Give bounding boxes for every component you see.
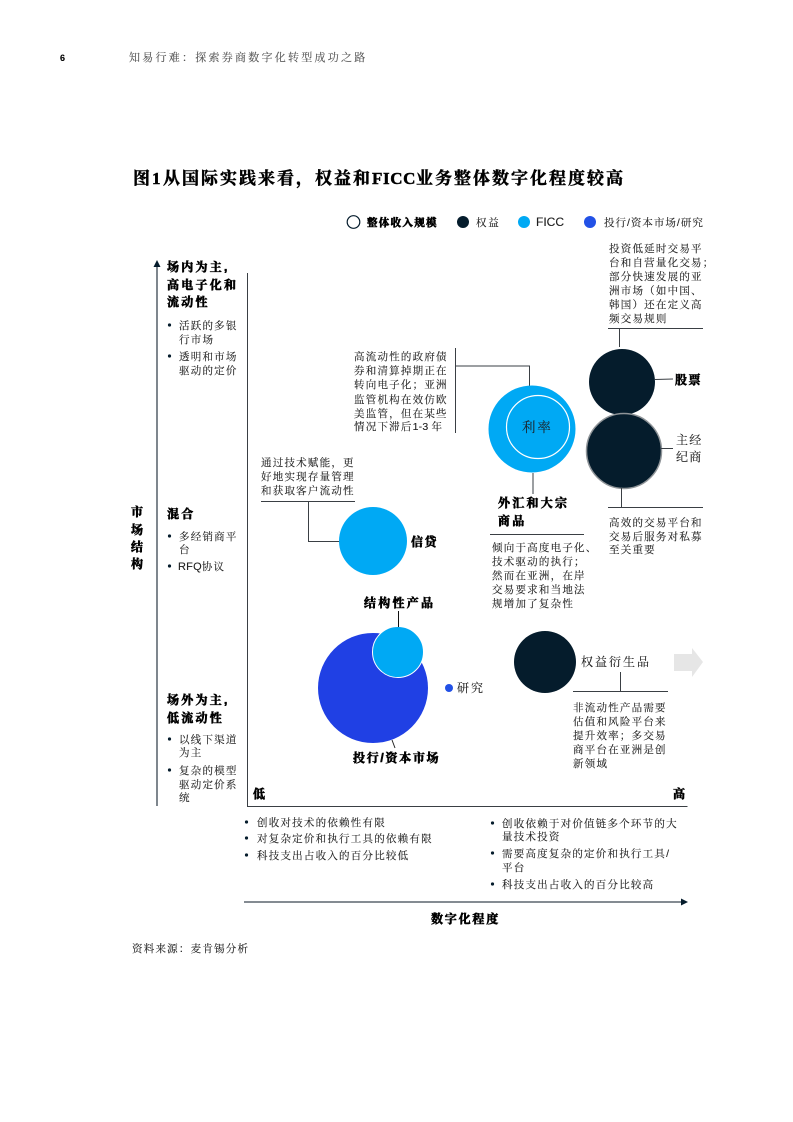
market structure: mixed: 台 [179, 543, 191, 556]
callout: equity derivatives note [573, 672, 668, 770]
legend: 投行/资本市场/研究 [604, 216, 704, 229]
callout: credit note: 好地实现存量管理 [261, 470, 355, 483]
callout: prime brokerage note: 高效的交易平台和 [609, 516, 703, 529]
callout: rates note: 美监管，但在某些 [354, 407, 448, 420]
low digitisation notes [245, 816, 433, 862]
y axis title: 构 [131, 556, 145, 571]
market structure: OTC: 复杂的模型 [179, 764, 238, 777]
market structure: on-exchange: 场内为主, [167, 259, 230, 274]
callout: FX note [490, 534, 597, 610]
market structure: OTC: 为主 [179, 746, 202, 759]
bubble: rates and FX: 利率 [522, 419, 553, 435]
callout: credit note [261, 456, 355, 542]
callout: equities note: 洲市场（如中国、 [609, 284, 703, 297]
callout: credit note: 和获取客户流动性 [261, 484, 355, 497]
market structure: OTC: 统 [179, 791, 191, 804]
market structure: on-exchange: 驱动的定价 [179, 364, 238, 377]
bubble: research [445, 680, 485, 695]
bubble: rates and FX [488, 386, 576, 528]
axis label: low: 低 [253, 786, 267, 801]
vertical axis arrow [154, 260, 160, 806]
bubble: equities [589, 349, 702, 415]
x axis title: 数字化程度 [431, 911, 500, 926]
market structure: OTC: 驱动定价系 [179, 778, 238, 791]
bubble: rates and FX: 外汇和大宗 [498, 495, 569, 510]
title: 从国际实践来看，权益和 [163, 168, 372, 189]
market structure: OTC: 低流动性 [167, 710, 224, 725]
callout: credit note: 通过技术赋能，更 [261, 456, 355, 469]
bubble: equity derivatives: 权益衍生品 [581, 654, 651, 669]
bubble: credit [339, 507, 439, 575]
callout: FX note: 交易要求和当地法 [492, 583, 586, 596]
market structure: mixed: 混合 [167, 506, 196, 521]
callout: equities note: 投资低延时交易平 [609, 242, 703, 255]
callout: rates note: 券和清算掉期正在 [354, 364, 448, 377]
callout: rates note: 监管机构在效仿欧 [354, 393, 448, 406]
bubble: equities: 股票 [675, 372, 702, 387]
title: 业务整体数字化程度较高 [416, 168, 625, 188]
low digitisation notes: 科技支出占收入的百分比较低 [257, 849, 409, 862]
chart frame axes [248, 273, 688, 806]
bubble: investment banking and structured products [318, 595, 440, 765]
low digitisation notes: 对复杂定价和执行工具的依赖有限 [257, 832, 433, 845]
callout: prime brokerage note [608, 488, 703, 556]
title: 图1 [133, 169, 160, 188]
callout: equity derivatives note: 估值和风险平台来 [573, 715, 667, 728]
high digitisation notes: 科技支出占收入的百分比较高 [502, 878, 654, 891]
y axis title [131, 505, 145, 571]
y axis title: 结 [131, 539, 145, 554]
callout: FX note: 规增加了复杂性 [492, 597, 574, 610]
high digitisation notes: 需要高度复杂的定价和执行工具/ [502, 847, 670, 860]
running header: 知易行难：探索券商数字化转型成功之路 [129, 50, 368, 64]
bubble: research: 研究 [457, 680, 485, 695]
page number: 6 [60, 53, 65, 63]
market structure: OTC [167, 692, 238, 804]
market structure: on-exchange [167, 259, 238, 377]
market structure: on-exchange: 高电子化和 [167, 277, 238, 292]
callout: prime brokerage note: 至关重要 [609, 543, 656, 556]
callout: equity derivatives note: 新领域 [573, 757, 608, 770]
callout: FX note: 倾向于高度电子化、 [492, 541, 597, 554]
callout: rates note: 高流动性的政府债 [354, 350, 448, 363]
market structure: mixed: RFQ协议 [178, 560, 225, 573]
callout: equities note: 部分快速发展的亚 [609, 270, 703, 283]
callout: equities note: 台和自营量化交易； [609, 256, 714, 269]
legend: 权益 [476, 216, 500, 229]
low digitisation notes: 创收对技术的依赖性有限 [257, 816, 386, 829]
market structure: OTC: 场外为主, [167, 692, 230, 707]
y axis title: 市 [131, 505, 145, 519]
icon: grey arrow [674, 648, 703, 677]
callout: rates note: 转向电子化；亚洲 [354, 378, 448, 391]
source: 资料来源：麦肯锡分析 [132, 942, 249, 955]
market structure: on-exchange: 流动性 [167, 294, 210, 309]
callout: rates note [354, 348, 530, 433]
callout: prime brokerage note: 交易后服务对私募 [609, 530, 703, 543]
bubble: credit: 信贷 [411, 534, 439, 549]
high digitisation notes: 平台 [502, 861, 525, 874]
bubble: prime brokerage: 纪商 [676, 449, 703, 464]
callout: FX note: 技术驱动的执行； [492, 555, 586, 568]
horizontal axis arrow [244, 898, 688, 906]
bubble: investment banking and structured products: 结构性产品 [364, 595, 435, 610]
bubble: equity derivatives [514, 631, 651, 693]
high digitisation notes: 量技术投资 [502, 830, 561, 843]
callout: FX note: 然而在亚洲，在岸 [492, 569, 586, 582]
bubble: rates and FX: 商品 [498, 514, 527, 528]
market structure: on-exchange: 活跃的多银 [179, 319, 238, 332]
axis label: high: 高 [673, 786, 687, 801]
bubble: investment banking and structured products: 投行/资本市场 [353, 750, 440, 765]
market structure: on-exchange: 行市场 [179, 333, 214, 346]
callout: equity derivatives note: 商平台在亚洲是创 [573, 743, 667, 756]
callout: equities note [608, 242, 714, 347]
callout: equities note: 韩国）还在定义高 [609, 298, 703, 311]
title: FICC [372, 169, 416, 188]
legend [347, 215, 704, 229]
market structure: mixed [167, 506, 238, 573]
bubble: prime brokerage: 主经 [676, 433, 703, 447]
y axis title: 场 [131, 522, 145, 537]
bubble: prime brokerage [586, 414, 703, 488]
market structure: OTC: 以线下渠道 [179, 733, 238, 746]
callout: equity derivatives note: 提升效率；多交易 [573, 729, 667, 742]
callout: rates note: 情况下滞后1-3 年 [354, 420, 443, 433]
market structure: on-exchange: 透明和市场 [179, 350, 238, 363]
high digitisation notes: 创收依赖于对价值链多个环节的大 [502, 817, 678, 830]
legend: FICC [536, 215, 564, 229]
callout: equities note: 频交易规则 [609, 312, 668, 325]
high digitisation notes [491, 817, 678, 891]
callout: equity derivatives note: 非流动性产品需要 [573, 701, 667, 714]
market structure: mixed: 多经销商平 [179, 530, 238, 543]
legend: 整体收入规模 [367, 216, 438, 229]
